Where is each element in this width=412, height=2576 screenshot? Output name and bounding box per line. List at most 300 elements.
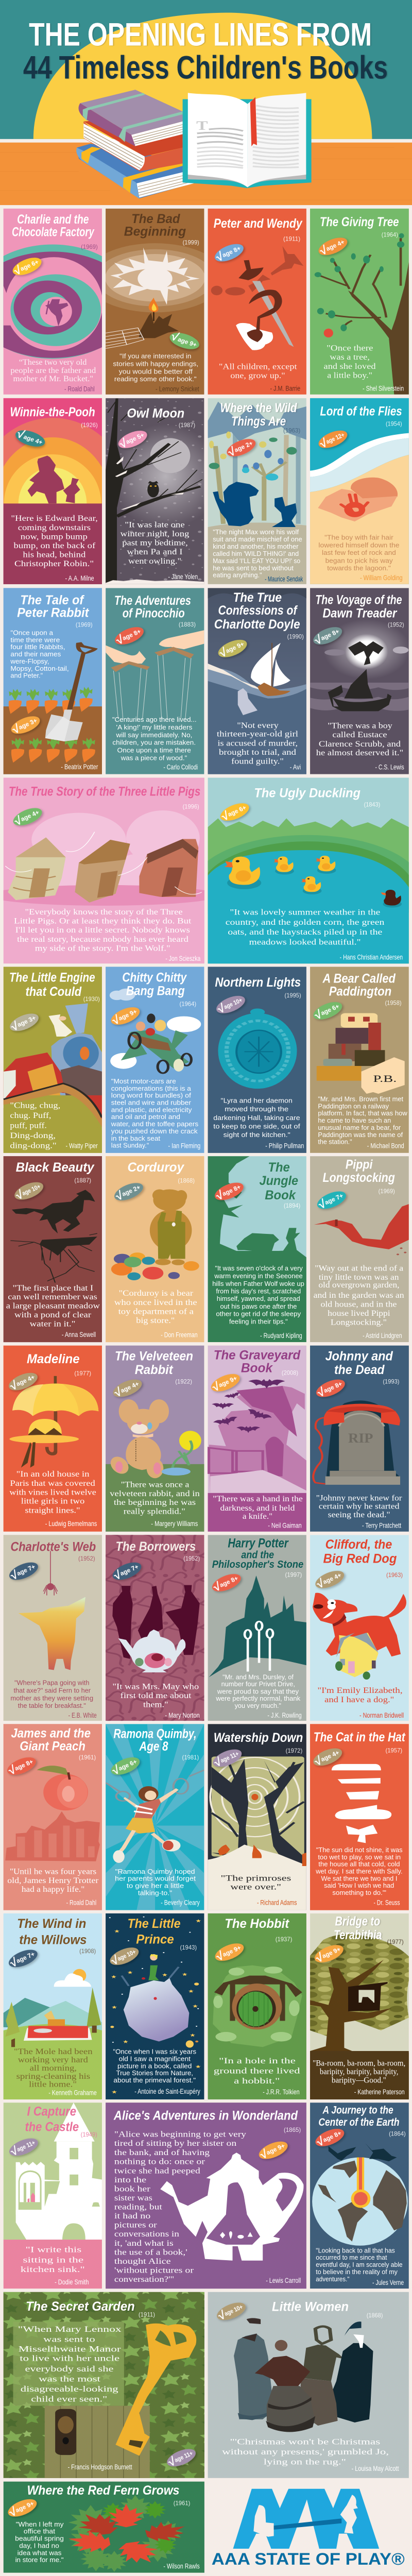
quote: Christopher Robin." (14, 559, 94, 568)
quote: "In an old house in (16, 1469, 90, 1479)
panel: I Capture the Castle: - Dodie Smith (55, 2278, 89, 2286)
quote (214, 2056, 300, 2086)
panel: The Giving Tree (310, 209, 409, 395)
age badge: √ (111, 1568, 124, 1582)
quote: to give her a little (127, 1882, 184, 1889)
panel: Bridge to Terabithia (310, 1913, 410, 2099)
illustration: moon, tree and owl (106, 398, 204, 584)
panel: The True Confessions of Charlotte Doyle (208, 588, 306, 774)
quote (316, 2247, 403, 2283)
age badge: age 10+ (21, 1183, 42, 1197)
title (23, 16, 388, 86)
illustration: gravestone and telephone (313, 1400, 400, 1485)
quote: was sent to (43, 2335, 95, 2344)
quote: puff, puff. (10, 1121, 47, 1130)
quote: coming downstairs (18, 523, 91, 532)
quote: Once upon a time there (117, 747, 191, 754)
panel: Madeline (4, 1346, 102, 1532)
panel: The Borrowers: - Mary Norton (165, 1711, 200, 1719)
quote: it, 'and what is (114, 2239, 174, 2247)
year: (1969) (379, 1188, 395, 1195)
age badge: age 8+ (221, 245, 242, 259)
panel: The Hobbit (208, 1913, 306, 2099)
quote (112, 716, 197, 761)
row 9 of book panels (4, 1724, 409, 1910)
year: (1964) (382, 232, 398, 238)
quote: people are the father and (10, 366, 96, 375)
year: (1952) (78, 1555, 95, 1562)
illustration: gravestone and telephone: RIP (348, 1431, 373, 1446)
title: the Castle (25, 2120, 79, 2134)
quote: "In a hole in the (219, 2056, 296, 2065)
age badge: age 9+ (321, 1946, 342, 1960)
quote: stories with happy endings, (113, 360, 198, 367)
quote (316, 1846, 403, 1896)
title (115, 1349, 193, 1377)
age badge: age 12+ (325, 431, 346, 445)
quote (316, 721, 403, 757)
panel: Alice's Adventures in Wonderland (106, 2103, 306, 2289)
age badge (311, 623, 345, 648)
title (12, 212, 95, 239)
quote: four little Rabbits, (10, 643, 65, 651)
quote: "It was Mrs. May who (112, 1682, 199, 1691)
quote (317, 1686, 403, 1704)
illustration: train on track (4, 1003, 102, 1153)
age badge: age 9+ (221, 1944, 242, 1958)
illustration: ferns (63, 2495, 195, 2572)
age badge: age 7+ (323, 1192, 345, 1206)
title (318, 2104, 400, 2128)
illustration: eye and match (106, 243, 204, 349)
quote: the table for breakfast." (18, 1702, 86, 1709)
age badge: √ (212, 1755, 224, 1769)
quote: number four Privet Drive, (221, 1681, 295, 1688)
panel: The Secret Garden: - Francis Hodgson Burnett (68, 2463, 132, 2471)
title (323, 1157, 395, 1185)
quote: thought Alice (114, 2257, 171, 2266)
panel: The Little Engine that Could (4, 967, 102, 1153)
title (115, 596, 191, 617)
title (214, 1348, 301, 1376)
age badge (107, 1944, 142, 1969)
age badge (10, 254, 44, 279)
age badge: √ (211, 1580, 223, 1594)
title: The True (233, 590, 282, 605)
age badge: age 4+ (321, 1571, 342, 1585)
illustration: spider and pig (19, 1551, 85, 1670)
illustration: tree, panther and boy (208, 1156, 306, 1342)
title (334, 1914, 382, 1942)
age badge (212, 1179, 246, 1204)
row 11 of book panels (4, 2103, 409, 2289)
title: Little Women (272, 2300, 349, 2314)
year: (1990) (287, 634, 304, 640)
logo: AAA State of Play (212, 2489, 405, 2568)
year: (1943) (180, 1945, 197, 1951)
title: Beginning (124, 225, 186, 239)
age badge: √ (215, 1002, 227, 1015)
quote (313, 2058, 405, 2084)
panel: Owl Moon (106, 398, 204, 584)
quote: "The night Max wore his wolf (213, 528, 299, 536)
panel: The Hobbit: - J.R.R. Tolkien (263, 2088, 300, 2096)
panel: Winnie-the-Pooh: - A.A. Milne (65, 574, 94, 582)
panel: Black Beauty (4, 1156, 102, 1342)
quote: "Centuries ago there lived... (112, 716, 197, 723)
age badge: age 11+ (15, 2139, 37, 2153)
age badge: age 5+ (125, 431, 145, 445)
age badge: age 11+ (219, 1750, 240, 1764)
panel: Pippi Longstocking (310, 1156, 409, 1342)
quote: water in it." (30, 1319, 75, 1328)
quote: and oil and petrol and (111, 1113, 180, 1121)
quote: "Corduroy is a bear (119, 1289, 193, 1298)
quote: "There was a hand in the (213, 1494, 303, 1503)
quote: her parents would forget (115, 1875, 196, 1883)
quote (10, 629, 69, 680)
quote: about the primeval forest." (113, 2076, 196, 2084)
year: (1949) (81, 2131, 97, 2138)
age badge: age 3+ (16, 1014, 37, 1028)
illustration: bats and graveyard (208, 1379, 306, 1532)
title (212, 1536, 303, 1570)
quote (222, 2437, 389, 2466)
quote: you very much." (235, 1702, 281, 1709)
quote (114, 2130, 246, 2284)
panel: The Bad Beginning (85, 209, 225, 395)
illustration: spiral (3, 244, 102, 359)
age badge: age 4+ (15, 1374, 36, 1387)
age badge: √ (216, 2308, 228, 2323)
quote (113, 352, 198, 383)
panel: Madeline: - Ludwig Bemelmans (45, 1520, 97, 1528)
title (11, 1726, 91, 1753)
quote: "There was once a (121, 1480, 190, 1489)
quote: was a piece of wood." (121, 754, 187, 761)
quote: and plastic, and electricity (111, 1106, 192, 1113)
year: (1911) (283, 236, 300, 243)
age badge: age 8+ (319, 628, 340, 641)
quote: warm evening in the Seeonee (214, 1272, 303, 1280)
year: (1937) (276, 1936, 292, 1943)
title: Where the Wild (220, 401, 297, 415)
quote: "Chug, chug, (10, 1101, 60, 1110)
title: Rabbit (135, 1363, 174, 1377)
panel: The Graveyard Book: - Neil Gaiman (268, 1521, 302, 1530)
icon: stack of books (76, 90, 194, 199)
title: Harry Potter (228, 1536, 289, 1550)
age badge: √ (317, 436, 330, 450)
quote: bump, on the back of (14, 541, 96, 550)
quote: sitting in the (23, 2256, 83, 2264)
illustration: flying car (110, 989, 201, 1073)
illustration: bear and buttons (111, 1189, 199, 1280)
quote: 'A king!' my little readers (116, 723, 193, 731)
age badge: √ (110, 1013, 122, 1027)
quote: it had no (114, 2211, 150, 2221)
age badge: √ (8, 1955, 20, 1970)
title (122, 971, 187, 998)
quote: is accused of murder, (217, 739, 298, 748)
year: (1911) (139, 2312, 155, 2318)
panel: Little Women (208, 2292, 409, 2478)
year: (1993) (383, 1379, 400, 1385)
title: James and the (11, 1726, 91, 1740)
age badge: age 7+ (119, 1563, 140, 1577)
panel: James and the Giant Peach: - Roald Dahl (66, 1899, 96, 1906)
quote: Max said 'I'LL EAT YOU UP!' so (213, 557, 300, 565)
quote: “These two very old (19, 358, 87, 367)
age badge (7, 2135, 41, 2159)
panel: Clifford, the Big Red Dog (310, 1535, 409, 1721)
quote: my side of the story. I'm the Wolf." (35, 943, 170, 953)
quote: one, grow up." (230, 371, 285, 380)
quote: I'll let you in on a little secret. Nobody knows (15, 925, 190, 935)
title: The Tale of (20, 593, 85, 607)
quote: reading some other book." (114, 375, 197, 383)
age badge (217, 800, 252, 824)
quote (115, 1868, 196, 1896)
panel: Ramona Quimby, Age 8: Ramona Quimby, (113, 1726, 197, 1741)
title: Charlotte Doyle (214, 617, 300, 632)
year: (1996) (183, 804, 199, 810)
age badge: √ (13, 1188, 25, 1202)
age badge: √ (114, 633, 126, 647)
panel: Lord of the Flies (310, 398, 409, 584)
quote: "All children, except (219, 362, 297, 371)
quote: will say immediately. No, (116, 731, 192, 739)
age badge: √ (312, 1008, 324, 1022)
age badge: √ (312, 1754, 324, 1768)
year: (2008) (282, 1370, 298, 1377)
panel: A Journey to the Center of the Earth (310, 2103, 409, 2289)
quote: were perfectly normal, thank (216, 1695, 300, 1702)
year: (1922) (175, 1379, 192, 1385)
age badge: age 4+ (319, 1749, 340, 1763)
title: Black Beauty (16, 1160, 95, 1175)
quote: Ding-dong, (10, 1131, 56, 1140)
quote: "The first place that I (12, 1283, 93, 1293)
age badge (315, 1188, 349, 1212)
panel: The Bad Beginning: - Lemony Snicket (156, 385, 199, 393)
panel: Ramona Quimby, Age 8: - Beverly Cleary (161, 1899, 200, 1906)
quote: Little Pigs. Or at least they think they do. But (14, 916, 192, 925)
row 6 of book panels (4, 1156, 409, 1342)
age badge: √ (314, 1577, 327, 1590)
quote: "Lyra and her daemon (221, 1097, 293, 1104)
quote: to live with her uncle (20, 2354, 119, 2363)
row 1 of book panels (0, 209, 409, 395)
age badge: √ (113, 1189, 125, 1203)
title: The Wind in (17, 1917, 86, 1931)
quote: with a pond of clear (14, 1310, 91, 1319)
quote: first told me about (121, 1691, 192, 1700)
year: (1977) (74, 1370, 91, 1377)
age badge (210, 1746, 245, 1770)
panel: Corduroy: - Don Freeman (161, 1331, 198, 1338)
title: I Capture (27, 2105, 76, 2119)
age badge (6, 1946, 40, 1971)
quote: "If you are interested in (119, 352, 191, 360)
age badge (12, 1179, 46, 1203)
quote: talking-to." (138, 1889, 172, 1896)
age badge: age 4+ (119, 1380, 140, 1394)
year: (1887) (74, 1177, 91, 1184)
quote: spring-cleaning his (16, 2072, 90, 2081)
panel: The Little Engine that Could: - Watty Piper (66, 1142, 98, 1149)
year: (1969) (76, 622, 93, 628)
quote: old, James Henry Trotter (7, 1876, 98, 1885)
quote: and their names (10, 650, 61, 658)
illustration: big red dog and house (313, 1593, 406, 1680)
age badge (215, 636, 250, 661)
illustration: hat and bow tie (332, 1764, 391, 1843)
quote: all morning, (30, 2063, 77, 2073)
illustration: puppeteer hands (106, 630, 204, 719)
quote: "Once upon a (10, 629, 53, 636)
icon: open book: T (196, 118, 208, 133)
panel: Harry Potter and the Philosopher's Stone (208, 1535, 306, 1721)
row 12 of book panels (4, 2292, 409, 2478)
quote (6, 1283, 100, 1328)
illustration: wild things in forest (208, 402, 306, 584)
title: Age 8 (139, 1739, 168, 1754)
panel: Charlie and the Chocolate Factory (3, 208, 102, 395)
age badge (108, 1754, 143, 1778)
panel: The Voyage of the Dawn Treader (310, 588, 410, 774)
quote (110, 1480, 200, 1516)
title (260, 1160, 298, 1202)
illustration: castle and goal hoops (209, 1575, 306, 1677)
age badge (6, 1369, 40, 1394)
icon: open book (183, 93, 312, 188)
quote: suit and made mischief of one (213, 535, 302, 543)
age badge: age 6+ (227, 804, 247, 818)
illustration: peach over city (5, 1766, 100, 1861)
quote: a large pleasant meadow (6, 1301, 100, 1310)
quote: conversations in (114, 2229, 179, 2239)
quote: out his paws one after the (220, 1302, 297, 1310)
panel: Northern Lights (208, 967, 306, 1153)
row 5 of book panels (4, 967, 409, 1153)
age badge: √ (214, 1188, 226, 1202)
age badge: age 9+ (265, 2142, 286, 2156)
panel: The Cat in the Hat (310, 1724, 409, 1910)
age badge: √ (10, 722, 22, 736)
age badge: √ (226, 445, 238, 459)
age badge: age 2+ (121, 1184, 142, 1198)
age badge (316, 234, 350, 259)
age badge (167, 329, 202, 352)
title (127, 1917, 181, 1946)
quote: toy department of a (118, 1307, 194, 1316)
age badge: √ (11, 263, 24, 278)
quote: and she loved (324, 362, 376, 370)
age badge (10, 804, 45, 829)
age badge: age 9+ (117, 1008, 138, 1022)
quote (318, 1095, 407, 1146)
panel: The Little Prince: - Antoine de Saint-Exupéry (134, 2088, 200, 2095)
quote: hills when Father Wolf woke up (212, 1280, 304, 1287)
title: that Could (25, 985, 82, 999)
illustration: carrots and shovel (9, 642, 98, 762)
year: (1981) (182, 1754, 199, 1761)
age badge (313, 1567, 347, 1592)
title: Book (265, 1188, 297, 1202)
age badge: age 8+ (218, 1574, 239, 1588)
age badge: √ (117, 436, 129, 450)
title: The Hobbit (225, 1917, 289, 1931)
quote: called Eustace (332, 730, 387, 739)
quote (318, 534, 400, 572)
title: Peter and Wendy (214, 216, 303, 231)
age badge: √ (6, 1763, 18, 1777)
panel: Corduroy (106, 1156, 204, 1342)
panel: Charlotte's Web (4, 1535, 102, 1721)
illustration: tree house (310, 1934, 410, 2099)
age badge: age 4+ (20, 809, 40, 823)
panel: The Borrowers (106, 1535, 204, 1721)
quote: found guilty." (231, 757, 284, 766)
quote: the use of a book,' (114, 2247, 187, 2257)
age badge (214, 992, 248, 1017)
quote: children, you are mistaken. (112, 739, 196, 747)
quote (112, 1682, 199, 1709)
panel: Northern Lights: - Philip Pullman (265, 1142, 304, 1149)
quote: sister was (114, 2193, 152, 2202)
quote (14, 2047, 93, 2089)
panel: Where the Red Fern Grows: - Wilson Rawls (163, 2562, 200, 2570)
row 13 (4, 2482, 405, 2573)
quote: pictures or (114, 2221, 157, 2229)
age badge (212, 241, 246, 265)
quote (212, 1264, 304, 1326)
age badge (5, 1754, 39, 1778)
age badge (316, 427, 350, 451)
quote: long word for bundles) of (111, 1092, 191, 1099)
quote: lying on the rug." (264, 2458, 346, 2466)
age badge (209, 1570, 244, 1595)
age badge (7, 1010, 41, 1035)
title: and the (241, 1549, 274, 1561)
age badge: √ (316, 1197, 328, 1211)
title (17, 593, 90, 620)
row 8 of book panels (4, 1535, 409, 1721)
illustration: umbrella and hat (9, 1376, 98, 1468)
panel: The Tale of Peter Rabbit: - Beatrix Potter (61, 762, 98, 771)
panel: Watership Down (208, 1724, 306, 1910)
quote (113, 2048, 196, 2084)
quote: "Everybody knows the story of the Three (25, 907, 183, 916)
quote: nothing to do: once or (114, 2157, 205, 2166)
quote (10, 1679, 93, 1709)
age badge (110, 1376, 145, 1400)
quote: working very hard (18, 2055, 88, 2064)
age badge (311, 1744, 345, 1769)
year: (1926) (81, 422, 98, 429)
age badge: √ (312, 633, 324, 647)
illustration: horse over cracked ground (10, 1190, 97, 1283)
quote: kitchen sink." (21, 2265, 85, 2274)
panel: Charlie and the Chocolate Factory: Chocolate Factory (12, 225, 95, 239)
title (323, 1537, 397, 1566)
title: Philosopher's Stone (212, 1558, 303, 1570)
year: (1987) (179, 422, 195, 429)
quote (221, 1874, 291, 1891)
title: Corduroy (127, 1160, 185, 1175)
age badge: age 6+ (117, 1758, 138, 1772)
